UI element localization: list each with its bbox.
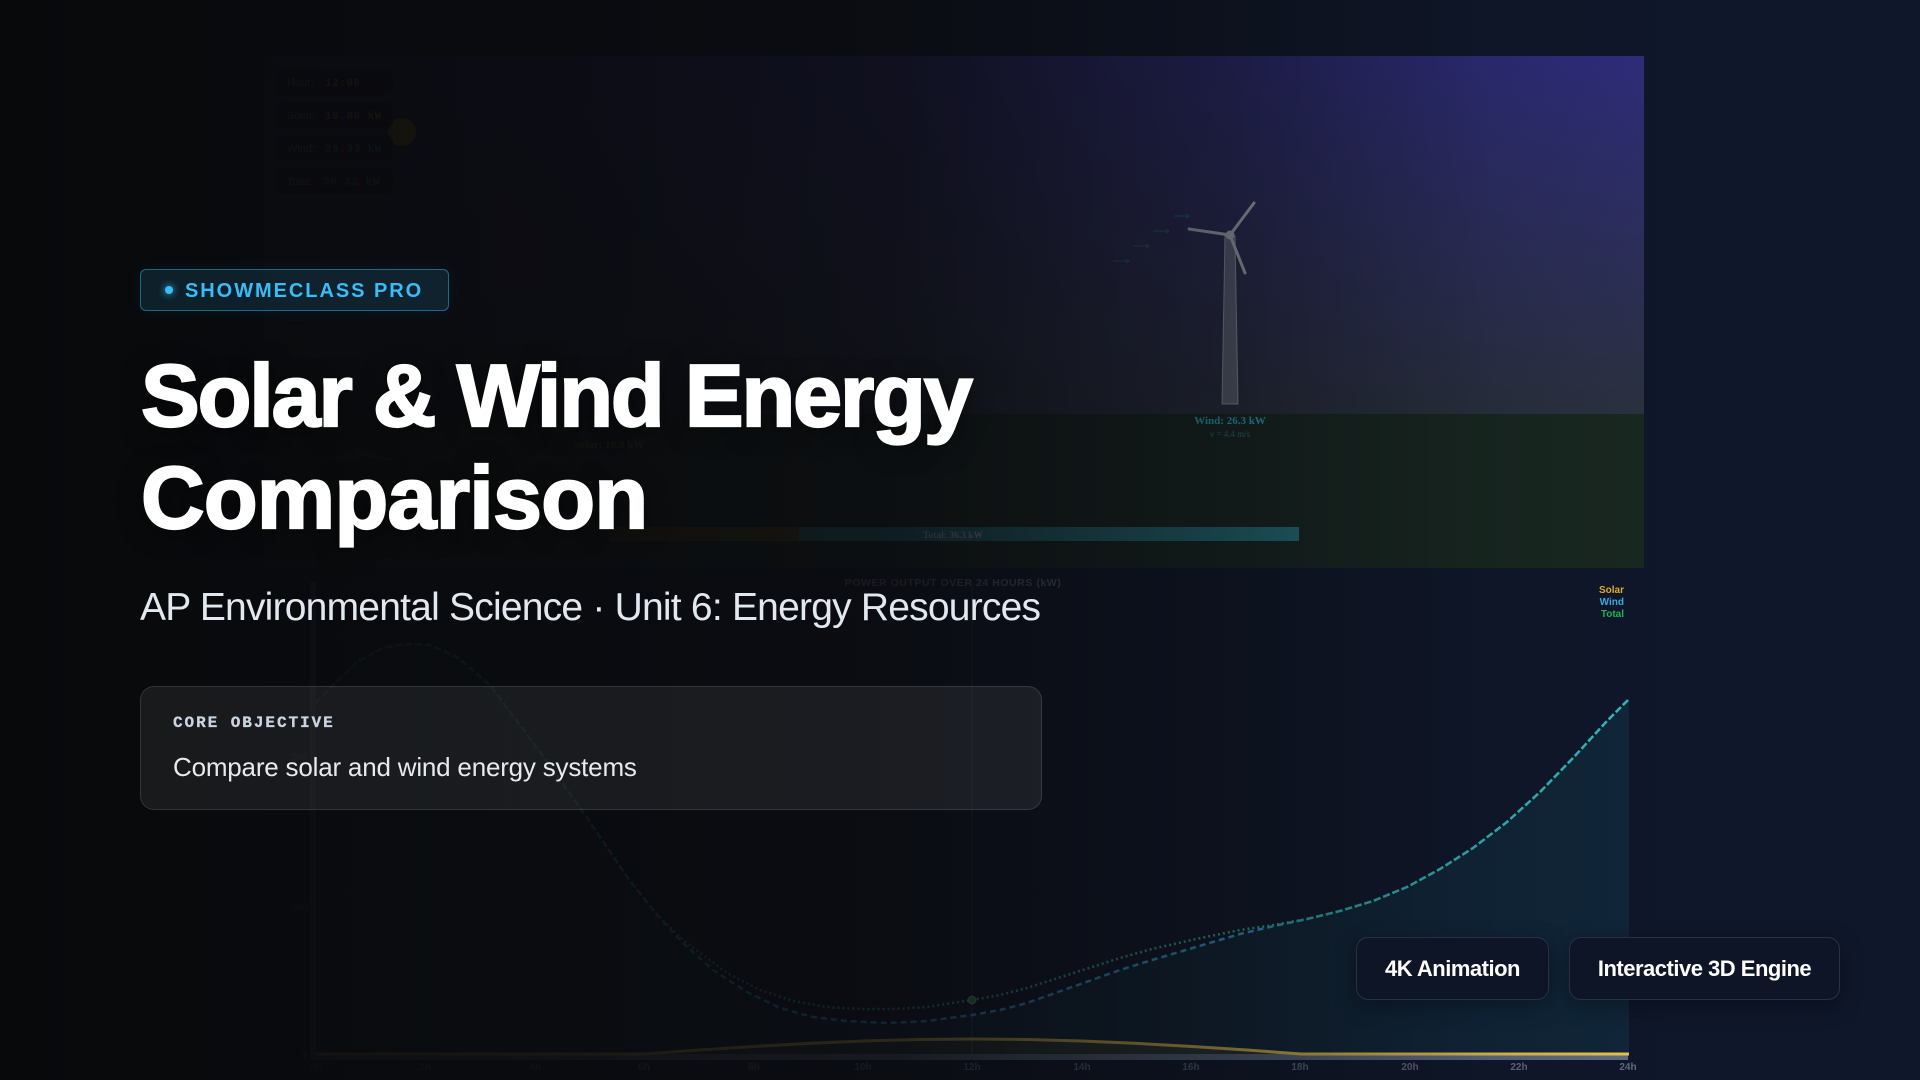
- x axis labels: [310, 1062, 1637, 1073]
- stat: hour: [277, 69, 393, 95]
- chip: interactive 3D engine: Interactive 3D Engine: [1598, 956, 1811, 981]
- stat: wind: 26.33 kW: [325, 144, 382, 156]
- 12h marker line: [971, 582, 973, 1054]
- stat: wind: [277, 135, 393, 161]
- panel: core objective: [140, 686, 1042, 810]
- x axis labels: 16h: [1182, 1062, 1200, 1073]
- x axis labels: 6h: [638, 1062, 650, 1073]
- panel: live stats: [277, 69, 393, 194]
- icon: wind turbine: [1189, 203, 1254, 404]
- chart legend: Total: [1601, 609, 1624, 620]
- wind speed label: v = 4.4 m/s: [1210, 429, 1251, 439]
- ground: [264, 414, 1644, 568]
- stat: total: 36.33 kW: [323, 177, 380, 189]
- x axis labels: 4h: [529, 1062, 541, 1073]
- x axis labels: 20h: [1401, 1062, 1419, 1073]
- stat: total: [277, 168, 393, 194]
- total output bar: Total: 36.3 kW: [923, 531, 984, 541]
- chip: interactive 3D engine: [1569, 937, 1840, 1000]
- x axis labels: 18h: [1291, 1062, 1309, 1073]
- x axis labels: 2h: [419, 1062, 431, 1073]
- x axis labels: 0h: [310, 1062, 322, 1073]
- chart title: POWER OUTPUT OVER 24 HOURS (kW): [845, 577, 1061, 589]
- panel: sky scene: [264, 56, 1644, 568]
- stat: solar: 10.00 kW: [325, 111, 382, 123]
- badge: [140, 269, 449, 311]
- icon: status dot: [165, 286, 173, 294]
- x axis labels: 24h: [1619, 1062, 1637, 1073]
- stat: solar: Solar:: [287, 110, 316, 122]
- y axis labels: 200: [291, 752, 308, 763]
- x axis labels: 12h: [963, 1062, 981, 1073]
- wind area fill: [316, 644, 1629, 1054]
- objective label: CORE OBJECTIVE: [173, 714, 335, 732]
- chart legend: Wind: [1600, 597, 1624, 608]
- stat: total: Total:: [287, 176, 313, 188]
- title: Solar & Wind Energy: [141, 346, 971, 445]
- x axis labels: 8h: [748, 1062, 760, 1073]
- title: [141, 346, 974, 548]
- wind label: Wind: 26.3 kW: [1194, 415, 1266, 427]
- wind line: [316, 644, 1629, 1023]
- total line: [316, 644, 1629, 1009]
- sky: [264, 56, 1644, 414]
- sun: [388, 118, 416, 146]
- line chart: power output: [291, 582, 1637, 1073]
- chart legend: [1599, 585, 1624, 620]
- x axis labels: 22h: [1510, 1062, 1528, 1073]
- solar area fill: [644, 1039, 1301, 1054]
- y axis labels: 100: [291, 902, 308, 913]
- y axis labels: 0: [302, 1051, 308, 1062]
- y axis labels: 300: [291, 602, 308, 613]
- stat: solar: [277, 102, 393, 128]
- chip: 4K animation: [1356, 937, 1549, 1000]
- total output bar: [609, 527, 1299, 541]
- x axis labels: 14h: [1073, 1062, 1091, 1073]
- subtitle: AP Environmental Science · Unit 6: Energy Resources: [140, 586, 1040, 629]
- badge text: SHOWMECLASS PRO: [185, 280, 423, 302]
- icon: wind arrows: [1113, 214, 1189, 263]
- chart axes: [313, 582, 1628, 1057]
- solar label: Solar: 10.0 kW: [574, 439, 644, 451]
- stat: hour: 12:00: [325, 78, 361, 90]
- title: Comparison: [141, 448, 647, 547]
- objective text: Compare solar and wind energy systems: [173, 752, 637, 782]
- stat: hour: Hour:: [287, 77, 314, 89]
- solar line: [316, 1039, 1629, 1054]
- stat: wind: Wind:: [287, 143, 315, 155]
- chip: 4K animation: 4K Animation: [1385, 956, 1520, 981]
- chart legend: Solar: [1599, 585, 1624, 596]
- current hour marker: [968, 996, 976, 1004]
- y axis labels: [291, 602, 308, 1062]
- x axis labels: 10h: [854, 1062, 872, 1073]
